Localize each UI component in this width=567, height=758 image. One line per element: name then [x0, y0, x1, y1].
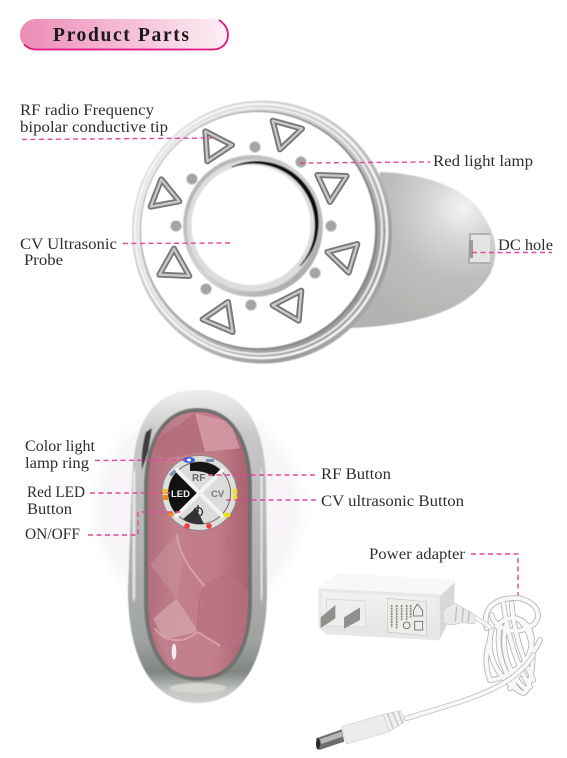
adapter body — [320, 575, 453, 639]
label: color light lamp ring: Color light — [25, 438, 96, 455]
label: RF button: RF Button — [321, 466, 391, 483]
label: red light lamp: Red light lamp — [433, 153, 533, 170]
prongs — [321, 605, 335, 628]
color light lamp ring LEDs — [163, 457, 237, 529]
label: power adapter: Power adapter — [369, 546, 466, 563]
button labels: RF — [192, 473, 205, 484]
button labels: CV — [211, 489, 225, 500]
button labels: LED — [171, 489, 190, 500]
strain relief — [443, 603, 475, 625]
label: RF tip — [20, 102, 212, 140]
handset halo — [86, 398, 310, 622]
control button cluster — [162, 456, 237, 530]
red light lamps: eight dots — [170, 142, 336, 310]
label: red LED button: Button — [27, 501, 72, 518]
label: RF tip: RF radio Frequency — [20, 102, 154, 119]
label: power adapter — [369, 546, 518, 600]
label: DC hole — [472, 237, 553, 254]
label: CV ultrasonic button: CV ultrasonic Button — [321, 493, 464, 510]
cable coil — [407, 598, 540, 718]
label: red LED button — [27, 484, 170, 518]
device head: probe body — [350, 172, 495, 328]
label: RF tip: bipolar conductive tip — [20, 119, 168, 136]
title: Product Parts — [53, 25, 189, 46]
adapter sticker — [387, 598, 427, 636]
label: red LED button: Red LED — [27, 484, 85, 501]
label: color light lamp ring: lamp ring — [25, 455, 89, 472]
label: CV ultrasonic probe — [20, 236, 230, 269]
button labels — [171, 473, 225, 516]
label: color light lamp ring — [25, 438, 188, 472]
DC plug — [316, 711, 404, 750]
device head: face with rings — [132, 100, 392, 364]
handset body — [128, 390, 267, 703]
label: ON/OFF: ON/OFF — [25, 526, 80, 543]
power adapter — [316, 575, 540, 750]
label: DC hole: DC hole — [498, 237, 553, 254]
title — [20, 19, 228, 50]
label: CV ultrasonic probe: Probe — [24, 252, 63, 269]
RF conductive tips: eight triangles — [151, 121, 357, 332]
handset pink panel with facets — [146, 410, 250, 680]
label: ON/OFF — [25, 512, 182, 543]
label: CV ultrasonic probe: CV Ultrasonic — [20, 236, 117, 253]
